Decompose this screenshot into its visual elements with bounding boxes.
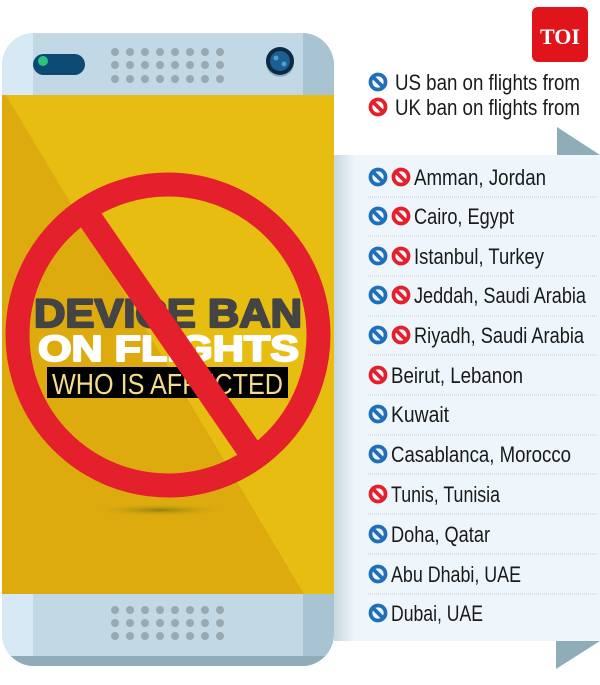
row: Casablanca: Casablanca, Morocco: [391, 442, 571, 467]
phone: [2, 33, 334, 666]
row: Dubai: Dubai, UAE: [391, 601, 483, 626]
row: Istanbul: [370, 244, 544, 269]
row: Amman: [370, 165, 546, 190]
fold triangle top: [557, 127, 600, 155]
icon: prohibition sign: [18, 175, 318, 495]
row: Abu Dhabi: Abu Dhabi, UAE: [391, 562, 521, 587]
speaker bottom: [111, 606, 224, 640]
row: Kuwait: Kuwait: [391, 402, 449, 427]
logo: TOI: TOI: [540, 24, 580, 49]
row: Cairo: Cairo, Egypt: [414, 204, 514, 229]
title: DEVICE BAN: [34, 292, 302, 336]
row: Istanbul: Istanbul, Turkey: [414, 244, 544, 269]
row: Dubai: [370, 601, 483, 626]
row: Cairo: [370, 204, 514, 229]
list panel: [334, 127, 600, 669]
legend: [370, 70, 580, 120]
row: Kuwait: [370, 402, 449, 427]
shadow under sign: [95, 504, 225, 516]
title: WHO IS AFFECTED: [52, 369, 283, 401]
row: Beirut: Beirut, Lebanon: [391, 363, 523, 388]
row: Doha: Doha, Qatar: [391, 522, 490, 547]
sensor pill: [33, 54, 85, 75]
row: Tunis: Tunis, Tunisia: [391, 482, 501, 507]
screen: [2, 95, 334, 594]
speaker top: [111, 48, 224, 83]
camera: [266, 47, 294, 77]
fold triangle bottom: [556, 641, 600, 669]
row: Amman: Amman, Jordan: [414, 165, 546, 190]
logo: TOI: [532, 7, 588, 62]
title: [34, 292, 302, 401]
title: ON FLIGHTS: [38, 328, 299, 369]
